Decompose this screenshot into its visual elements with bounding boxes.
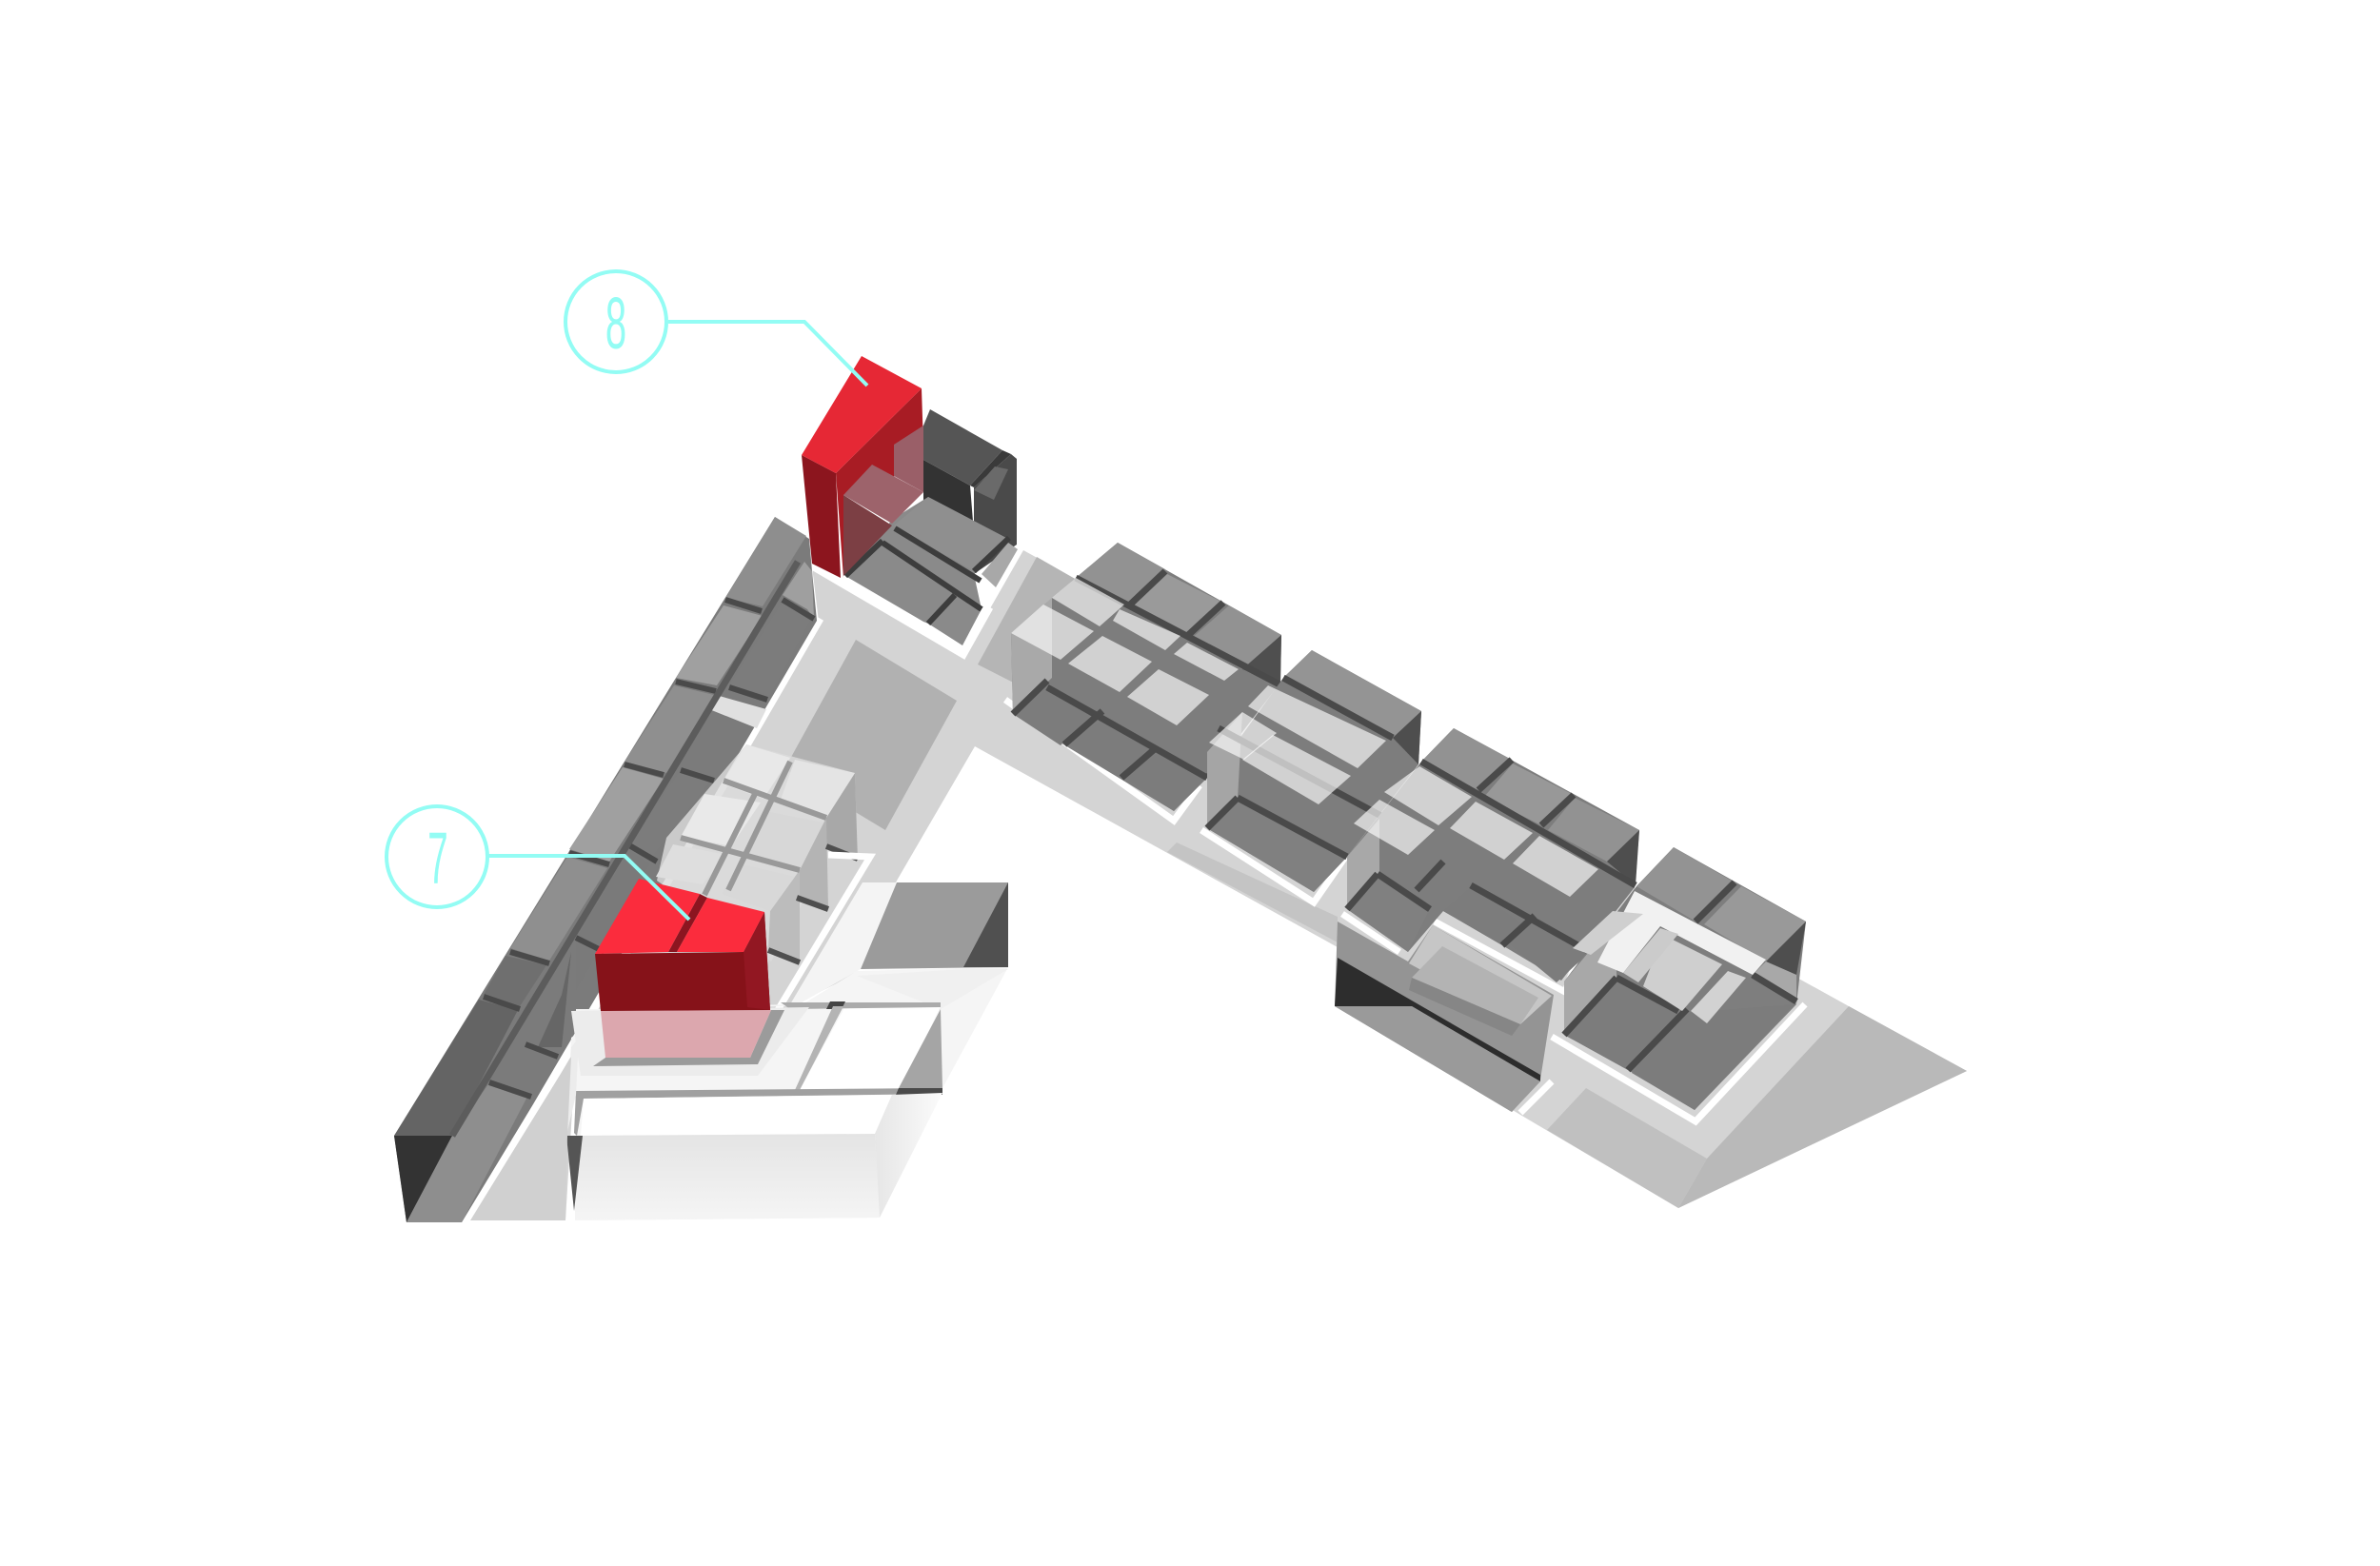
slots — [484, 600, 814, 1097]
far right arm cluster 3 — [1347, 728, 1639, 982]
white footprint strips — [470, 548, 1805, 1223]
red building: marker 7 — [571, 879, 809, 1076]
far right arm cluster 2 — [1207, 650, 1421, 892]
dark front block — [1335, 922, 1554, 1112]
red building: marker 8 — [802, 356, 923, 578]
left arm building row — [394, 517, 817, 1222]
inner wall cells — [538, 562, 814, 1047]
roof caps — [394, 517, 806, 1136]
marker 8 callout — [565, 271, 867, 386]
cluster near marker 8 — [845, 409, 1018, 645]
ground plane — [471, 550, 1967, 1220]
glass grid block beside marker 7 — [656, 744, 870, 1010]
marker 7 callout — [387, 806, 689, 920]
marker 8 callout: 8 — [605, 283, 626, 366]
marker 7 callout: 7 — [427, 817, 448, 899]
far right arm cluster 4 — [1564, 847, 1806, 1110]
far right arm cluster 1 — [1011, 543, 1281, 811]
bottom-right glass volume — [470, 882, 1008, 1220]
